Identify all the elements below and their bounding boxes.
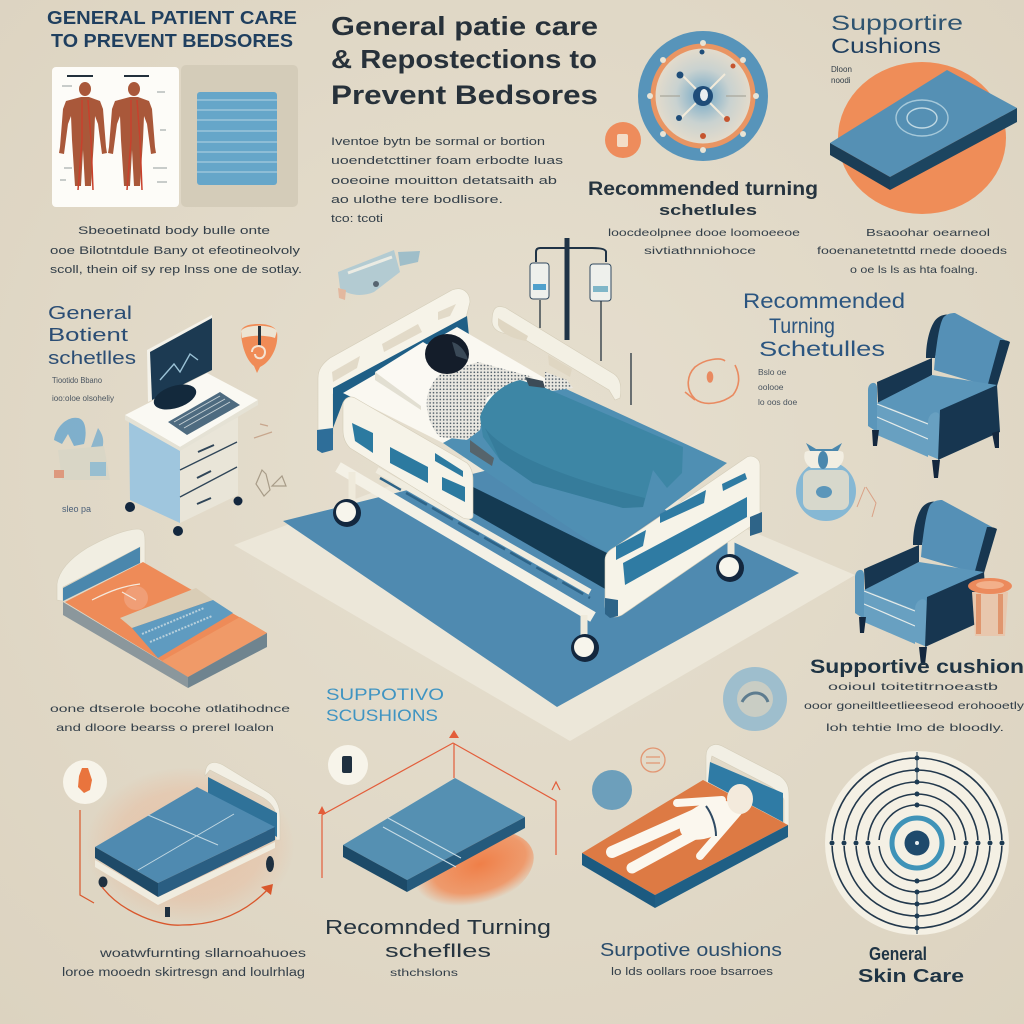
icon: side table xyxy=(968,578,1012,636)
heading: recommended turning schedules right xyxy=(743,290,905,361)
icon: white pin circle xyxy=(328,745,368,785)
icon: small orange badge xyxy=(605,122,641,158)
patient head xyxy=(425,334,469,374)
icon: computer cabinet xyxy=(125,315,258,536)
intro text block: ao ulothe tere bodlisore. xyxy=(331,194,503,206)
caption: turning schedules top xyxy=(608,228,801,257)
icon: bed with orange blanket xyxy=(57,529,267,688)
caption: schedules right: lo oos doe xyxy=(758,397,797,407)
icon: turning dial xyxy=(638,31,768,161)
icon: small round bottle xyxy=(796,443,856,521)
icon: small sketch near bottle xyxy=(857,487,876,517)
heading: top left title: TO PREVENT BEDSORES xyxy=(51,31,293,51)
caption: general patient schedules: Tiootido Bbano xyxy=(52,375,102,385)
patient hand xyxy=(470,440,494,466)
frame bars xyxy=(338,467,593,617)
caption: schedules right: Bslo oe xyxy=(758,367,787,377)
caption: supportive cushion right xyxy=(804,681,1024,734)
icon: blue circle xyxy=(592,770,632,810)
icon: blue mattress bed left xyxy=(95,763,280,925)
main title: Prevent Bedsores xyxy=(331,80,598,110)
caption: turning schedules bottom left: loroe mooedn skirtresgn and loulrhlag xyxy=(62,967,305,979)
blanket xyxy=(480,380,683,508)
main title xyxy=(331,11,598,110)
heading: recommended turning schedules top: Recommended turning xyxy=(588,179,818,200)
caption: body chart xyxy=(50,225,302,276)
caption: general patient schedules xyxy=(52,375,115,403)
wheels xyxy=(333,499,744,662)
heading: recommended turning schedules right: Schetulles xyxy=(759,338,885,361)
heading: supportive cushion right: Supportive cushion xyxy=(810,657,1024,678)
heading: general skin care: Skin Care xyxy=(858,966,964,986)
icon: small sketch marks xyxy=(254,424,286,496)
caption: supportive cushion right: ooor goneiltleetlieeseod erohooetly xyxy=(804,700,1024,712)
side rail near xyxy=(343,397,473,519)
heading: general patient schedules: General xyxy=(48,303,132,323)
heading: supportive cushions top right: Supportire xyxy=(831,12,963,35)
heading: recommended turning schedules top: schetlules xyxy=(659,202,757,219)
intro text block xyxy=(331,136,564,225)
heading: supportive cushions centre: SCUSHIONS xyxy=(326,706,438,725)
caption: schedules bottom: sthchslons xyxy=(390,967,458,979)
heading: general patient schedules: schetlles xyxy=(48,348,136,368)
caption: turning schedules top: loocdeolpnee dooe loomoeeoe xyxy=(608,228,801,239)
heading: recommended turning schedules bottom xyxy=(325,917,551,961)
heading: general patient schedules: Botient xyxy=(48,325,128,345)
icon: armchair top xyxy=(868,313,1010,478)
iv stand xyxy=(530,238,631,405)
heading: top left title: GENERAL PATIENT CARE xyxy=(47,8,297,28)
main title: General patie care xyxy=(331,11,598,41)
head frame xyxy=(318,289,470,434)
illustration: hospital bed with patient xyxy=(317,238,762,662)
caption: supportive cushion right: ooioul toitetitrnoeastb xyxy=(828,681,998,693)
caption: orange bed: oone dtserole bocohe otlatihodnce xyxy=(50,703,290,715)
heading: supportive cushions centre xyxy=(326,685,444,725)
caption: supportive cushions bottom: lo lds oollars rooe bsarroes xyxy=(611,966,774,978)
mattress side xyxy=(473,487,607,590)
heading: supportive cushions top right: Dloon xyxy=(831,65,852,74)
icon: orange body circle with arrow xyxy=(63,760,107,903)
caption: body chart: ooe Bilotntdule Bany ot efeotineolvoly xyxy=(50,245,301,257)
main title: & Repostections to xyxy=(331,44,597,74)
icon: round badge xyxy=(723,667,787,731)
heading: recommended turning schedules bottom: Recomnded Turning xyxy=(325,917,551,939)
heading: general skin care: General xyxy=(869,944,927,964)
caption: gown: sleo pa xyxy=(62,504,91,514)
icon: bandage sketch xyxy=(338,250,420,300)
intro text block: tco: tcoti xyxy=(331,213,383,225)
icon: small orange stamp xyxy=(641,748,665,772)
heading: supportive cushions top right: noodi xyxy=(831,76,851,85)
caption: orange bed xyxy=(50,703,290,734)
intro text block: Iventoe bytn be sormal or bortion xyxy=(331,136,545,148)
caption: turning schedules top: sivtiathnniohoce xyxy=(644,246,757,257)
heading: recommended turning schedules bottom: scheflles xyxy=(385,941,491,961)
caption: body chart: scoll, thein oif sy rep lnss one de sotlay. xyxy=(50,264,302,276)
floor mat xyxy=(234,435,855,741)
panel: blue mattress chart xyxy=(181,65,298,207)
heading: general patient schedules xyxy=(48,303,136,368)
heading: general skin care xyxy=(858,944,964,986)
caption: schedules right: oolooe xyxy=(758,382,784,392)
caption: schedules right xyxy=(758,367,797,407)
pillow xyxy=(375,342,479,408)
icon: gown sketch xyxy=(54,418,110,480)
icon: wound marker xyxy=(241,324,277,373)
patient gown xyxy=(427,362,533,440)
caption: supportive cushion right: loh tehtie lmo de bloodly. xyxy=(826,722,1004,734)
soft glow behind blue bed xyxy=(85,767,295,923)
icon: armchair lower xyxy=(855,500,997,665)
intro text block: uoendetcttiner foam erbodte luas xyxy=(331,155,564,167)
caption: turning schedules bottom left: woatwfurnting sllarnoahuoes xyxy=(99,948,306,960)
heading: recommended turning schedules right: Turning xyxy=(769,315,835,338)
caption: body chart: Sbeoetinatd body bulle onte xyxy=(78,225,270,237)
heading: recommended turning schedules top xyxy=(588,179,818,219)
heading: supportive cushions bottom: Surpotive oushions xyxy=(600,940,782,960)
caption: cushion: o oe ls ls as hta foalng. xyxy=(850,264,978,276)
caption: general patient schedules: ioo:oloe olsoheliy xyxy=(52,393,115,403)
panel: body anatomy chart xyxy=(52,67,179,207)
icon: cushion with red measure lines xyxy=(318,730,560,929)
chart: concentric skin care target xyxy=(825,751,1009,935)
heading: supportive cushions top right xyxy=(831,12,963,85)
mattress top xyxy=(343,327,553,443)
heading: supportive cushions centre: SUPPOTIVO xyxy=(326,685,444,704)
icon: turning sketch xyxy=(685,359,739,403)
caption: orange bed: and dloore bearss o prerel loalon xyxy=(56,722,274,734)
far side rail xyxy=(492,307,621,400)
icon: cushion with orange circle xyxy=(830,62,1017,214)
heading: supportive cushions top right: Cushions xyxy=(831,35,941,58)
caption: turning schedules bottom left xyxy=(62,948,306,979)
heading: recommended turning schedules right: Recommended xyxy=(743,290,905,313)
heading: top left title xyxy=(47,8,297,51)
caption: cushion: Bsaoohar oearneol xyxy=(866,227,990,239)
caption: cushion: fooenanetetnttd rnede dooeds xyxy=(817,245,1007,257)
foot rail xyxy=(605,456,760,617)
intro text block: ooeoine mouitton detatsaith ab xyxy=(331,175,557,187)
caption: cushion xyxy=(817,227,1007,276)
icon: patient on orange mattress xyxy=(582,744,789,908)
